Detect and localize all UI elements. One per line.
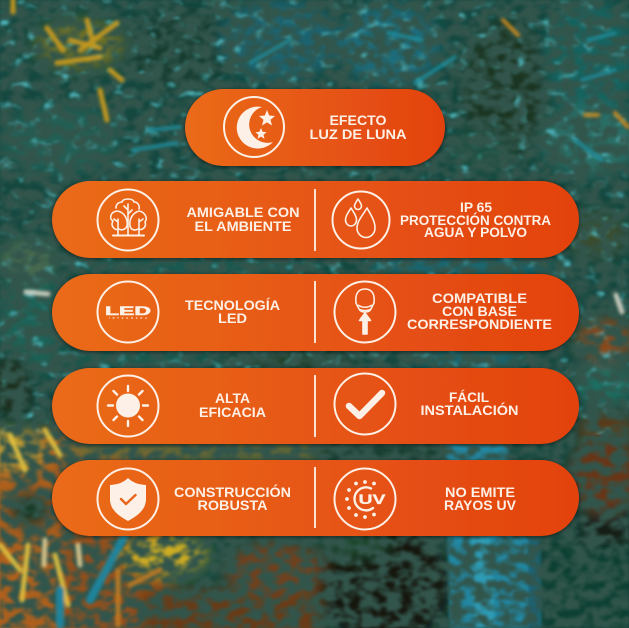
- icon: check mark: [334, 374, 396, 434]
- text: alta eficacia: EFICACIA: [199, 405, 266, 420]
- icon: water drops: [332, 192, 390, 248]
- text: no emite rayos uv: NO EMITE: [445, 485, 515, 500]
- icon: uv sun: UV: [358, 491, 386, 507]
- text: compatible con base correspondiente: CON BASE: [442, 304, 517, 319]
- text: ip 65 proteccion: [400, 200, 551, 240]
- text: tecnologia led: TECNOLOGÍA: [185, 298, 280, 313]
- text: facil instalacion: [420, 390, 518, 418]
- panel: row 1: [52, 181, 579, 258]
- text: construccion robusta: [174, 485, 291, 513]
- panel: row 3: [52, 368, 579, 444]
- text: amigable con el ambiente: EL AMBIENTE: [194, 219, 292, 234]
- icon: moon and stars: [224, 97, 284, 157]
- panel: efecto luz de luna: [185, 89, 445, 166]
- text: no emite rayos uv: [444, 485, 516, 513]
- icon: shield with check: [98, 468, 158, 530]
- text: facil instalacion: FÁCIL: [449, 390, 489, 405]
- text: ip 65 proteccion: PROTECCIÓN CONTRA: [400, 213, 551, 228]
- text: amigable con el ambiente: [186, 205, 300, 234]
- text: amigable con el ambiente: AMIGABLE CON: [186, 205, 300, 220]
- text: efecto luz de luna: [310, 113, 407, 142]
- icon: trees: [98, 190, 158, 250]
- panel: row 4: [52, 460, 579, 536]
- text: alta eficacia: ALTA: [215, 391, 250, 406]
- text: ip 65 proteccion: IP 65: [460, 200, 492, 215]
- teal leaf texture: [0, 0, 629, 435]
- icon: led: [98, 282, 158, 342]
- icon: led: LED: [105, 306, 151, 318]
- text: facil instalacion: INSTALACIÓN: [420, 403, 518, 418]
- text: efecto luz de luna: LUZ DE LUNA: [310, 127, 407, 142]
- icon: sun: [98, 376, 158, 436]
- icon: lamp base with arrow: [334, 282, 396, 342]
- text: compatible con base correspondiente: [407, 291, 552, 332]
- text: alta eficacia: [199, 391, 266, 420]
- tree trunk: [445, 444, 541, 628]
- text: tecnologia led: [185, 298, 280, 326]
- text: tecnologia led: LED: [218, 311, 247, 326]
- panel: row 2: [52, 274, 579, 351]
- text: construccion robusta: ROBUSTA: [198, 498, 268, 513]
- text: construccion robusta: CONSTRUCCIÓN: [174, 485, 291, 500]
- warm lower foliage: [0, 430, 629, 628]
- text: ip 65 proteccion: AGUA Y POLVO: [424, 225, 527, 240]
- icon: led: INTEGRADA: [109, 317, 147, 320]
- text: no emite rayos uv: RAYOS UV: [444, 498, 516, 513]
- icon: uv sun: [334, 468, 396, 530]
- text: compatible con base correspondiente: COMPATIBLE: [432, 291, 527, 306]
- text: compatible con base correspondiente: CORRESPONDIENTE: [407, 317, 552, 332]
- text: efecto luz de luna: EFECTO: [330, 113, 386, 128]
